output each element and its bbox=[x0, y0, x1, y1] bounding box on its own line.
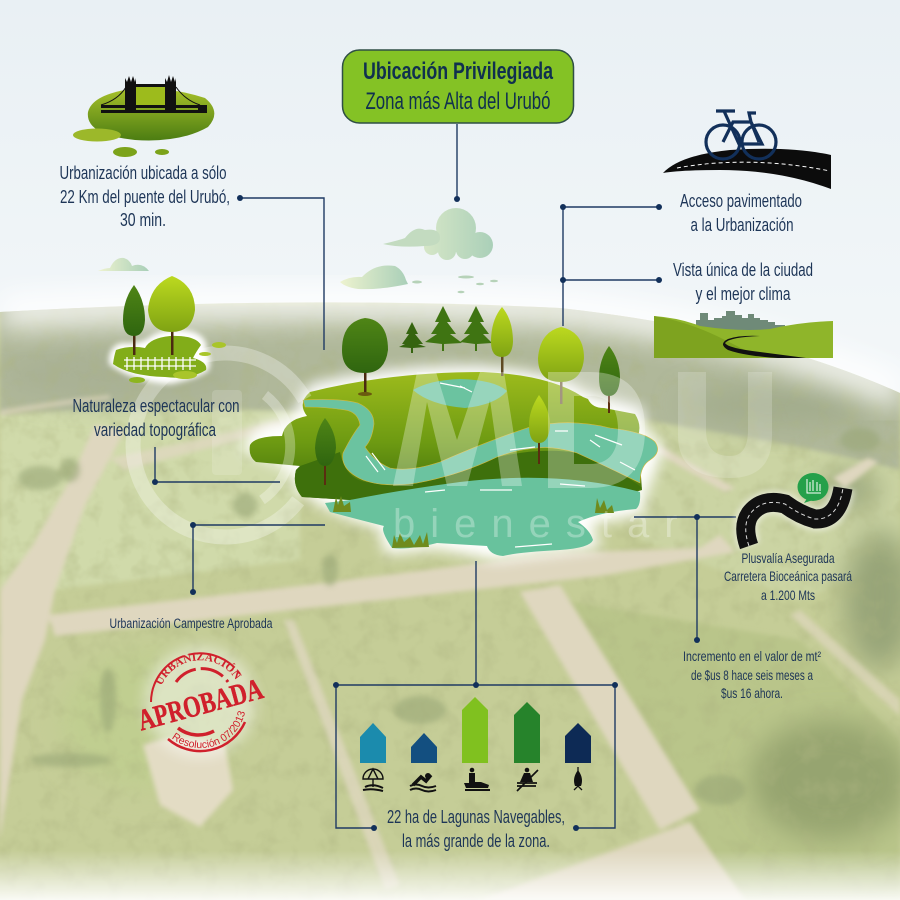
lake bbox=[325, 478, 640, 556]
title box bbox=[342, 50, 574, 123]
icon: approved stamp: URBANIZACIÓN bbox=[156, 654, 242, 684]
noise bbox=[0, 360, 895, 848]
text: approved label: Urbanización Campestre Aprobada bbox=[110, 616, 273, 631]
text: plusvalía: a 1.200 Mts bbox=[761, 587, 815, 603]
watermark: MDU bienestar logo: bienestar bbox=[393, 502, 693, 546]
text: paved access bbox=[680, 191, 802, 235]
text: value increase: de $us 8 hace seis meses a bbox=[691, 667, 813, 683]
tree: large dark bbox=[342, 318, 388, 396]
icon: approved stamp: Resolución 07/2013 bbox=[172, 711, 245, 748]
text: distance bbox=[60, 163, 230, 230]
text: nature: variedad topográfica bbox=[94, 420, 217, 440]
panel: lagoons bbox=[360, 697, 591, 851]
icon: road and city landscape bbox=[654, 311, 833, 358]
icons: beach, swim, jet ski, kayak, diving bbox=[363, 767, 582, 792]
text: nature bbox=[72, 396, 240, 440]
text: unique view: y el mejor clima bbox=[696, 284, 791, 304]
watermark: MDU bienestar logo bbox=[133, 353, 772, 546]
hill lower shade bbox=[295, 451, 642, 500]
tree: slim lime top bbox=[491, 307, 513, 376]
icon: small cloud bbox=[98, 258, 149, 271]
island glow bbox=[250, 372, 657, 555]
icon: winding road bbox=[746, 488, 843, 546]
text: lagoons bbox=[387, 807, 565, 851]
tree: slim dark right bbox=[599, 346, 620, 413]
text: unique view bbox=[673, 260, 813, 304]
icon: bridge on green blob bbox=[73, 75, 214, 157]
text: value increase: Incremento en el valor de mt² bbox=[683, 648, 821, 664]
text: distance: 22 Km del puente del Urubó, bbox=[60, 187, 230, 207]
text: plusvalía bbox=[724, 550, 852, 603]
text: plusvalía: Carretera Bioceánica pasará bbox=[724, 568, 852, 584]
water highlights bbox=[366, 383, 635, 547]
chart: house-shaped activity bars bbox=[360, 697, 591, 763]
icon: trees and fence bbox=[113, 276, 226, 383]
connector lines bbox=[152, 124, 736, 831]
small pond bbox=[413, 379, 507, 408]
hill bbox=[250, 372, 642, 500]
text: lagoons: 22 ha de Lagunas Navegables, bbox=[387, 807, 565, 827]
icon: approved stamp: APROBADA bbox=[134, 672, 267, 737]
text: paved access: Acceso pavimentado bbox=[680, 191, 802, 211]
icon: chart speech bubble bbox=[798, 473, 828, 503]
text: paved access: a la Urbanización bbox=[690, 215, 794, 235]
clouds bbox=[340, 208, 498, 293]
panel: plusvalía bbox=[683, 473, 852, 701]
cluster of trees bbox=[315, 306, 620, 485]
text: distance: 30 min. bbox=[120, 210, 166, 230]
title box: Ubicación Privilegiada bbox=[363, 58, 553, 85]
panel: bridge bbox=[60, 75, 230, 230]
text: value increase: $us 16 ahora. bbox=[721, 685, 783, 701]
grass tufts bbox=[333, 496, 614, 548]
tree: small lime front bbox=[529, 395, 550, 464]
text: unique view: Vista única de la ciudad bbox=[673, 260, 813, 280]
panel: central island illustration bbox=[250, 208, 658, 556]
text: lagoons: la más grande de la zona. bbox=[402, 831, 550, 851]
text: plusvalía: Plusvalía Asegurada bbox=[742, 550, 835, 566]
icon: bicycle on road bbox=[663, 111, 831, 189]
icon: approved stamp bbox=[134, 640, 267, 760]
tree: large lime bbox=[538, 327, 584, 404]
text: distance: Urbanización ubicada a sólo bbox=[60, 163, 226, 183]
title box: Zona más Alta del Urubó bbox=[366, 88, 550, 115]
tree: left dark faded bbox=[315, 418, 336, 485]
panel: paved access and view bbox=[654, 111, 833, 358]
panel: nature bbox=[72, 258, 240, 440]
pine trees bbox=[399, 306, 492, 353]
river bbox=[303, 399, 658, 485]
panel: approved urbanization bbox=[110, 616, 273, 760]
text: nature: Naturaleza espectacular con bbox=[72, 396, 240, 416]
text: value increase bbox=[683, 648, 821, 701]
